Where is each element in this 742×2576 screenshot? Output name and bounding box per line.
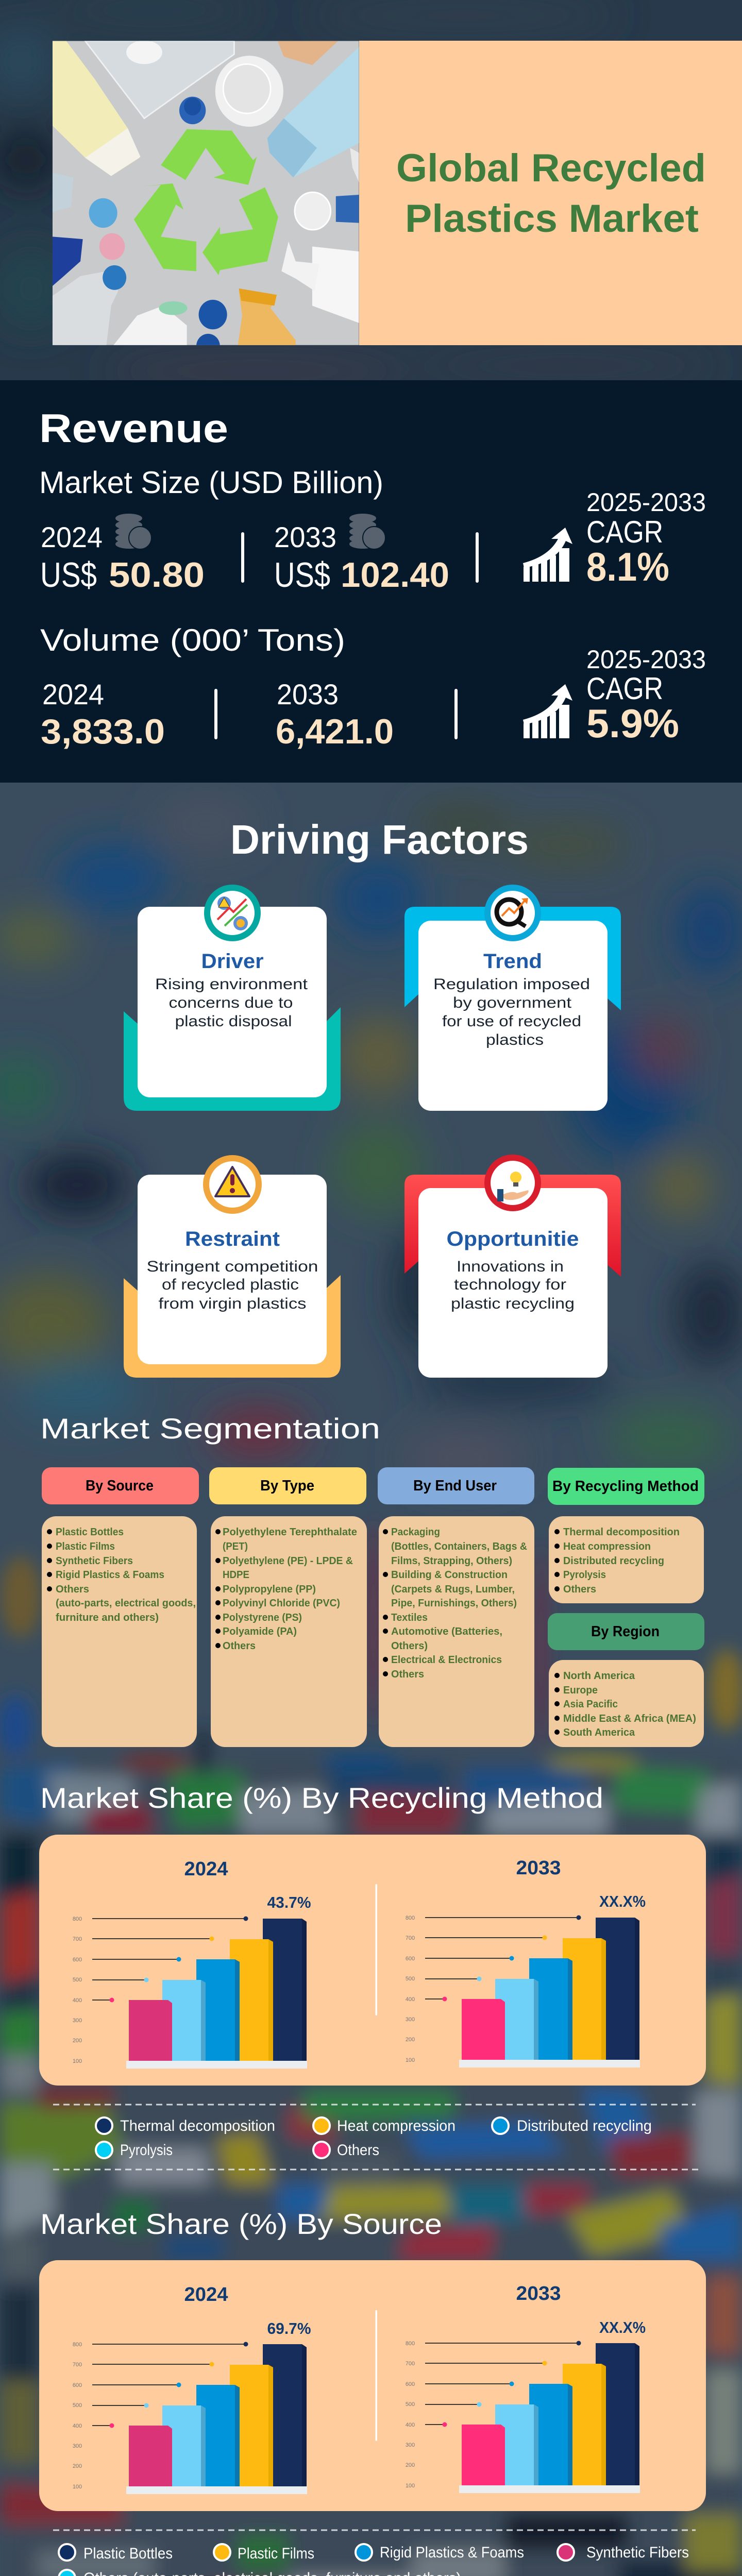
chart: recycling method 2024: 600 (73, 1957, 82, 1963)
restraint text (146, 1258, 318, 1312)
volume CAGR: CAGR (586, 671, 663, 706)
2033 market size: 2033 (274, 521, 336, 553)
card: driver (124, 885, 341, 1111)
restraint text: Stringent competition (146, 1258, 318, 1275)
2033 volume: 2033 (277, 678, 339, 710)
restraint text: from virgin plastics (159, 1295, 306, 1312)
chart: recycling method 2024: 500 (73, 1977, 82, 1983)
title: Plastics Market (405, 197, 699, 241)
2024 volume: 3,833.0 (41, 712, 165, 751)
driver title: Driver (201, 950, 264, 973)
icon: restraint (203, 1155, 262, 1214)
segmentation: by source: Synthetic Fibers (56, 1555, 133, 1567)
chart: recycling method 2033 (406, 1857, 646, 2067)
segmentation: by end user: Others) (391, 1640, 428, 1652)
segmentation: by region: South America (563, 1727, 635, 1738)
segmentation: by end user: Automotive (Batteries, (391, 1626, 502, 1637)
segmentation: by end user: Building & Construction (391, 1569, 508, 1581)
trend text: for use of recycled (442, 1013, 581, 1030)
chart: source 2024: 100 (73, 2484, 82, 2490)
2024 volume (41, 678, 165, 751)
chart: source 2033: 600 (406, 2381, 415, 2387)
legend: source: Plastic Bottles (83, 2545, 173, 2562)
2024 market size: 2024 (41, 521, 103, 553)
icon: growth arrow (523, 528, 572, 582)
segmentation: by recycling method: Others (563, 1584, 596, 1595)
2033 market size: US$ (274, 555, 330, 595)
segmentation: by region: Europe (563, 1685, 598, 1696)
legend: recycling method (53, 2105, 698, 2170)
segmentation: by recycling method: Heat compression (563, 1541, 651, 1552)
driver text (155, 976, 308, 1030)
chart: source 2024: 500 (73, 2402, 82, 2409)
market size label: Market Size (USD Billion) (39, 465, 383, 500)
chart: source 2024: 200 (73, 2463, 82, 2469)
segmentation: by type: Polyethylene (PE) - LPDE & (223, 1555, 353, 1567)
chart: source 2033: 200 (406, 2462, 415, 2468)
segmentation: by source: Plastic Films (56, 1541, 115, 1552)
chart: recycling method 2033: 300 (406, 2016, 415, 2023)
chart: source 2033: 800 (406, 2341, 415, 2347)
legend: source (53, 2530, 698, 2576)
2033 volume (276, 678, 394, 751)
legend: recycling method: Others (337, 2142, 379, 2159)
icon: growth arrow (523, 684, 572, 738)
chart: recycling method 2024: 700 (73, 1936, 82, 1942)
segmentation: by region: Asia Pacific (563, 1699, 618, 1710)
segmentation: by source: furniture and others) (56, 1612, 159, 1623)
title: Global Recycled (396, 146, 706, 190)
trend text: Regulation imposed (433, 976, 590, 993)
segmentation: by end user: Others (391, 1669, 424, 1680)
panel: recycling method charts (39, 1835, 706, 2086)
legend: recycling method: Distributed recycling (517, 2117, 652, 2134)
chart: source 2033 (406, 2283, 646, 2493)
chart: source 2024: 400 (73, 2423, 82, 2429)
chart: recycling method 2024: 300 (73, 2018, 82, 2024)
2033 volume: 6,421.0 (276, 712, 394, 751)
hero photo: plastic containers around recycling symbol (53, 40, 359, 359)
revenue CAGR: 2025-2033 (586, 488, 706, 517)
segmentation: by type: (PET) (223, 1541, 248, 1552)
legend: source: Rigid Plastics & Foams (380, 2544, 524, 2561)
volume CAGR: 5.9% (586, 701, 679, 746)
panel: source charts (39, 2260, 706, 2511)
segmentation: by recycling method: Pyrolysis (563, 1569, 606, 1581)
segmentation: by recycling method (548, 1468, 704, 1603)
trend text: plastics (486, 1031, 544, 1048)
2024 volume: 2024 (42, 678, 104, 710)
title panel (359, 41, 742, 345)
chart: source 2033: 500 (406, 2401, 415, 2408)
revenue panel (0, 380, 742, 783)
legend: source: Plastic Films (238, 2545, 314, 2562)
legend: recycling method: Heat compression (337, 2117, 456, 2134)
hero panel (53, 40, 742, 359)
segmentation: by region (548, 1613, 704, 1747)
chart: recycling method 2033: 700 (406, 1935, 415, 1941)
revenue CAGR: CAGR (586, 515, 663, 549)
icon: opportunitie (484, 1155, 541, 1211)
chart: recycling method 2033: 2033 (516, 1857, 561, 1879)
chart: recycling method 2024: 200 (73, 2038, 82, 2044)
chart: recycling method 2033: 800 (406, 1915, 415, 1921)
legend: recycling method: Thermal decomposition (120, 2117, 275, 2134)
chart: recycling method 2033: 500 (406, 1976, 415, 1982)
trend text (433, 976, 590, 1048)
revenue CAGR (523, 488, 706, 589)
segmentation: by end user (378, 1467, 534, 1747)
segmentation: by source: By Source (86, 1478, 154, 1494)
chart: source 2033: 300 (406, 2442, 415, 2448)
title (396, 146, 706, 241)
chart: recycling method 2024 (73, 1858, 311, 2069)
card: trend (404, 885, 621, 1111)
opportunitie text: plastic recycling (451, 1295, 575, 1312)
segmentation: by end user: Pipe, Furnishings, Others) (391, 1598, 517, 1609)
chart: source 2033: XX.X% (599, 2318, 646, 2336)
driver text: Rising environment (155, 976, 308, 993)
segmentation: by type: Polyethylene Terephthalate (223, 1527, 357, 1538)
segmentation: by type: Others (223, 1640, 256, 1652)
segmentation: by type: By Type (260, 1478, 314, 1494)
segmentation: by end user: Films, Strapping, Others) (391, 1555, 512, 1567)
legend: recycling method: Pyrolysis (120, 2142, 173, 2159)
heading: revenue: Revenue (39, 405, 228, 451)
2024 market size: 50.80 (109, 555, 205, 595)
segmentation: by recycling method: Thermal decomposition (563, 1527, 680, 1538)
2024 market size (40, 514, 205, 595)
chart: recycling method 2024: 2024 (184, 1858, 228, 1880)
icon: trend (484, 885, 541, 941)
segmentation: by end user: By End User (413, 1478, 497, 1494)
segmentation: by type: Polyamide (PA) (223, 1626, 297, 1637)
segmentation: by type: Polyvinyl Chloride (PVC) (223, 1598, 340, 1609)
trend title: Trend (483, 950, 542, 973)
segmentation: by source: Plastic Bottles (56, 1527, 124, 1538)
segmentation: by type: Polystyrene (PS) (223, 1612, 302, 1623)
chart: source 2024: 600 (73, 2382, 82, 2388)
volume CAGR: 2025-2033 (586, 645, 706, 674)
opportunitie text: Innovations in (457, 1258, 564, 1275)
restraint title: Restraint (185, 1228, 280, 1250)
chart: recycling method 2033: XX.X% (599, 1892, 646, 1910)
chart: source 2033: 100 (406, 2483, 415, 2489)
chart: recycling method 2033: 100 (406, 2057, 415, 2063)
trend text: by government (453, 994, 572, 1011)
segmentation: by recycling method: Distributed recycling (563, 1555, 664, 1567)
chart: source 2024 (73, 2284, 311, 2494)
segmentation: by end user: (Carpets & Rugs, Lumber, (391, 1584, 515, 1595)
restraint text: of recycled plastic (162, 1276, 299, 1293)
opportunitie text (451, 1258, 575, 1312)
card: opportunitie (404, 1155, 621, 1378)
opportunitie text: technology for (454, 1276, 566, 1293)
chart: source 2033: 400 (406, 2422, 415, 2428)
2033 market size (274, 514, 449, 595)
chart: source 2024: 69.7% (267, 2319, 311, 2337)
chart: source 2024: 700 (73, 2362, 82, 2368)
segmentation: by region: North America (563, 1670, 635, 1682)
icon: coins (115, 514, 151, 549)
segmentation: by type: Polypropylene (PP) (223, 1584, 316, 1595)
segmentation: by source (42, 1467, 199, 1747)
segmentation: by region: Middle East & Africa (MEA) (563, 1713, 696, 1724)
chart: recycling method 2024: 43.7% (267, 1893, 311, 1911)
2024 market size: US$ (40, 555, 97, 595)
chart: source 2024: 2024 (184, 2284, 228, 2306)
card: restraint (124, 1155, 341, 1378)
segmentation: by type: HDPE (223, 1569, 249, 1581)
segmentation: by source: (auto-parts, electrical goods, (56, 1598, 196, 1609)
chart: recycling method 2033: 200 (406, 2037, 415, 2043)
heading: market segmentation: Market Segmentation (40, 1412, 380, 1445)
segmentation: by end user: Electrical & Electronics (391, 1654, 502, 1666)
chart: recycling method 2024: 100 (73, 2058, 82, 2064)
driver text: plastic disposal (175, 1013, 292, 1030)
segmentation: by type (209, 1467, 367, 1747)
opportunitie title: Opportunitie (446, 1228, 579, 1250)
chart: recycling method 2033: 600 (406, 1956, 415, 1962)
segmentation: by recycling method: By Recycling Method (552, 1478, 699, 1495)
icon: coins (349, 514, 385, 549)
volume CAGR (523, 645, 706, 746)
chart: source 2024: 300 (73, 2443, 82, 2449)
chart: recycling method 2033: 400 (406, 1996, 415, 2003)
legend: source: Synthetic Fibers (586, 2544, 689, 2561)
heading: market share by source: Market Share (%) By Source (40, 2208, 442, 2240)
segmentation: by source: Rigid Plastics & Foams (56, 1569, 164, 1581)
heading: market share by recycling method: Market Share (%) By Recycling Method (40, 1782, 603, 1814)
chart: source 2033: 700 (406, 2361, 415, 2367)
heading: driving factors: Driving Factors (230, 817, 529, 862)
segmentation: by end user: Packaging (391, 1527, 440, 1538)
driver text: concerns due to (169, 994, 293, 1011)
revenue CAGR: 8.1% (586, 544, 669, 589)
segmentation: by source: Others (56, 1584, 89, 1595)
chart: source 2033: 2033 (516, 2283, 561, 2304)
chart: recycling method 2024: 400 (73, 1997, 82, 2004)
icon: driver (204, 885, 261, 941)
segmentation: by end user: (Bottles, Containers, Bags & (391, 1541, 527, 1552)
volume label: Volume (000’ Tons) (40, 623, 345, 657)
segmentation: by region: By Region (591, 1623, 660, 1640)
chart: source 2024: 800 (73, 2342, 82, 2348)
2033 market size: 102.40 (341, 555, 449, 595)
chart: recycling method 2024: 800 (73, 1916, 82, 1922)
segmentation: by end user: Textiles (391, 1612, 428, 1623)
